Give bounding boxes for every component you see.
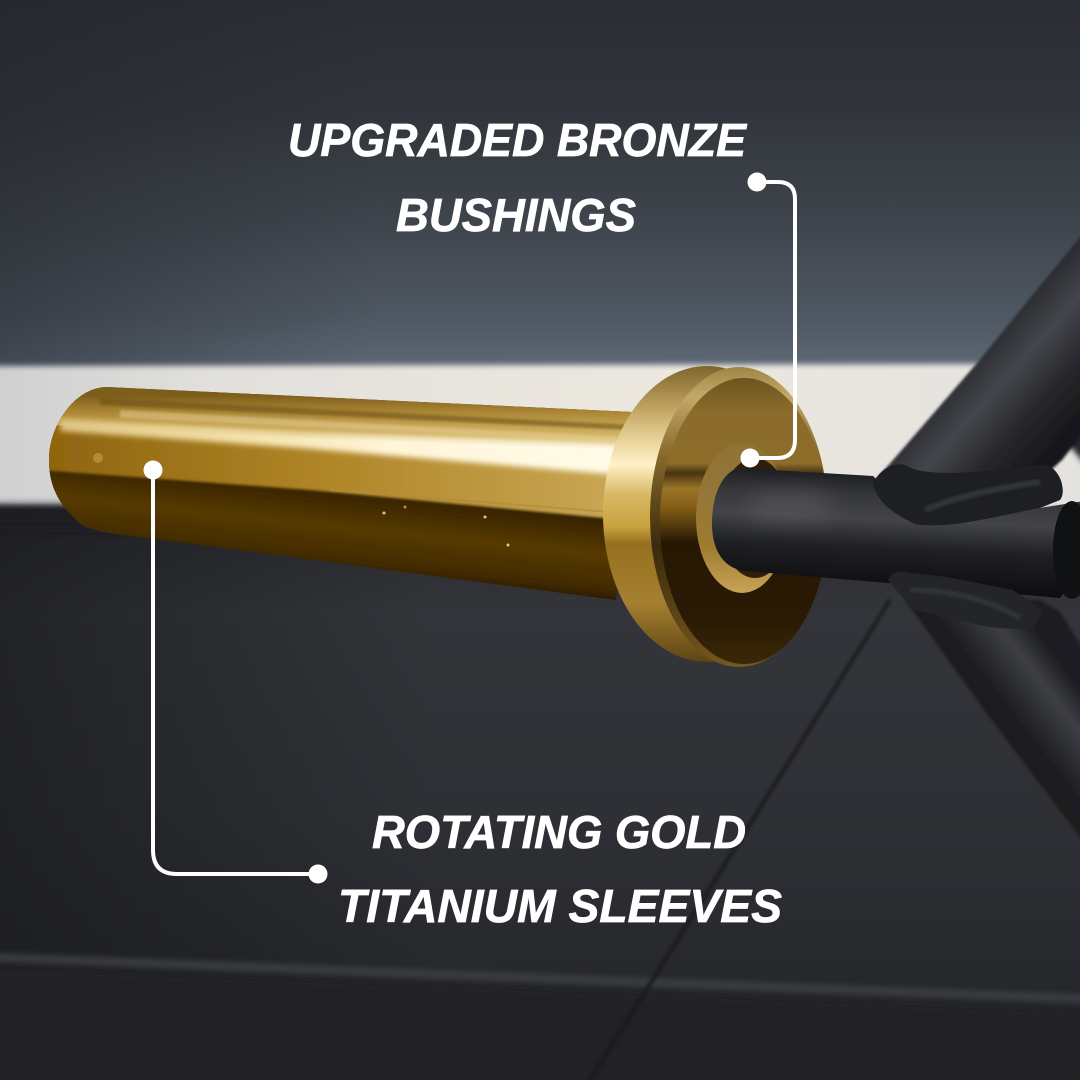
bronze bushing	[696, 443, 791, 593]
callout: bushing leader line	[740, 172, 795, 468]
lower frame arm	[905, 600, 1080, 850]
barbell sleeve	[49, 387, 632, 600]
heading: upgraded bronze bushings	[288, 114, 747, 241]
upper frame arm	[873, 225, 1080, 520]
heading: upgraded bronze bushings: UPGRADED BRONZE	[288, 114, 747, 166]
sleeve flange	[603, 366, 828, 667]
background: wall	[0, 0, 1080, 372]
callout: sleeve leader line	[144, 460, 328, 884]
background: floor	[0, 495, 1080, 1080]
background: white band	[0, 364, 1080, 510]
heading: rotating gold titanium sleeves: TITANIUM SLEEVES	[338, 880, 782, 932]
knurled weld joints	[873, 464, 1080, 629]
heading: rotating gold titanium sleeves: ROTATING GOLD	[372, 806, 746, 858]
heading: rotating gold titanium sleeves	[338, 806, 782, 932]
floor shadow under band	[0, 506, 880, 528]
steel shaft	[712, 468, 1080, 598]
heading: upgraded bronze bushings: BUSHINGS	[396, 189, 636, 241]
